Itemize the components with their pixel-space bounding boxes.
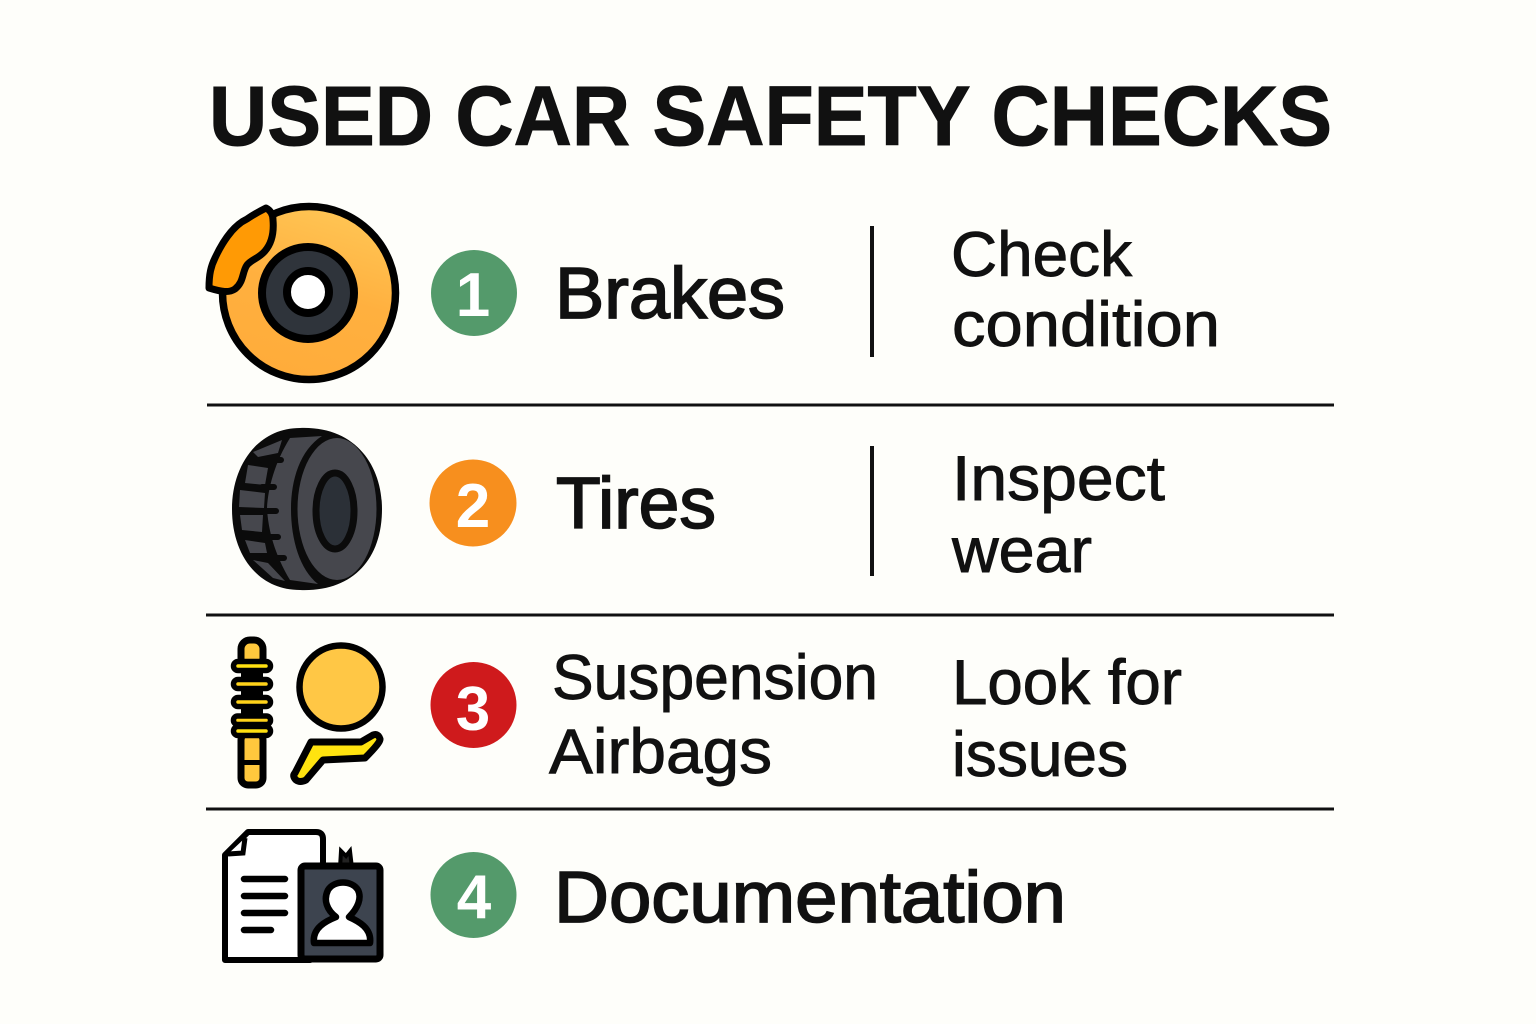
- label: Documentation: Documentation: [554, 858, 1066, 938]
- text: inspect wear: [951, 444, 1166, 586]
- number badge 1: 1: [456, 261, 490, 330]
- text: check condition: condition: [952, 290, 1220, 360]
- label: Brakes: Brakes: [555, 254, 785, 334]
- row: suspension and airbags: [234, 640, 1182, 790]
- text: inspect wear: Inspect: [952, 444, 1166, 514]
- title: USED CAR SAFETY CHECKS: [209, 69, 1332, 163]
- label: suspension airbags: Airbags: [549, 717, 772, 787]
- number badge 3: [430, 662, 516, 748]
- text: look for issues: Look for: [952, 648, 1182, 718]
- label: suspension airbags: Suspension: [552, 643, 878, 713]
- label: Tires: Tires: [556, 464, 716, 544]
- text: look for issues: issues: [952, 720, 1128, 790]
- text: look for issues: [952, 648, 1182, 790]
- icon: brake disc: [209, 206, 396, 380]
- text: inspect wear: wear: [951, 516, 1092, 586]
- icon: airbag: [294, 646, 382, 782]
- icon: suspension spring: [234, 640, 270, 785]
- row: brakes: [209, 206, 1220, 380]
- text: check condition: Check: [951, 220, 1133, 290]
- number badge 4: 4: [457, 863, 492, 932]
- number badge 2: 2: [456, 472, 490, 541]
- number badge 4: [430, 852, 516, 938]
- number badge 1: [431, 250, 517, 336]
- number badge 2: [430, 460, 516, 546]
- icon: document and id badge: [225, 832, 380, 960]
- row: tires: [232, 428, 1166, 590]
- icon: tire: [232, 428, 382, 590]
- row: documentation: [225, 832, 1066, 960]
- number badge 3: 3: [456, 675, 490, 744]
- label: suspension airbags: [549, 643, 878, 787]
- text: check condition: [951, 220, 1220, 360]
